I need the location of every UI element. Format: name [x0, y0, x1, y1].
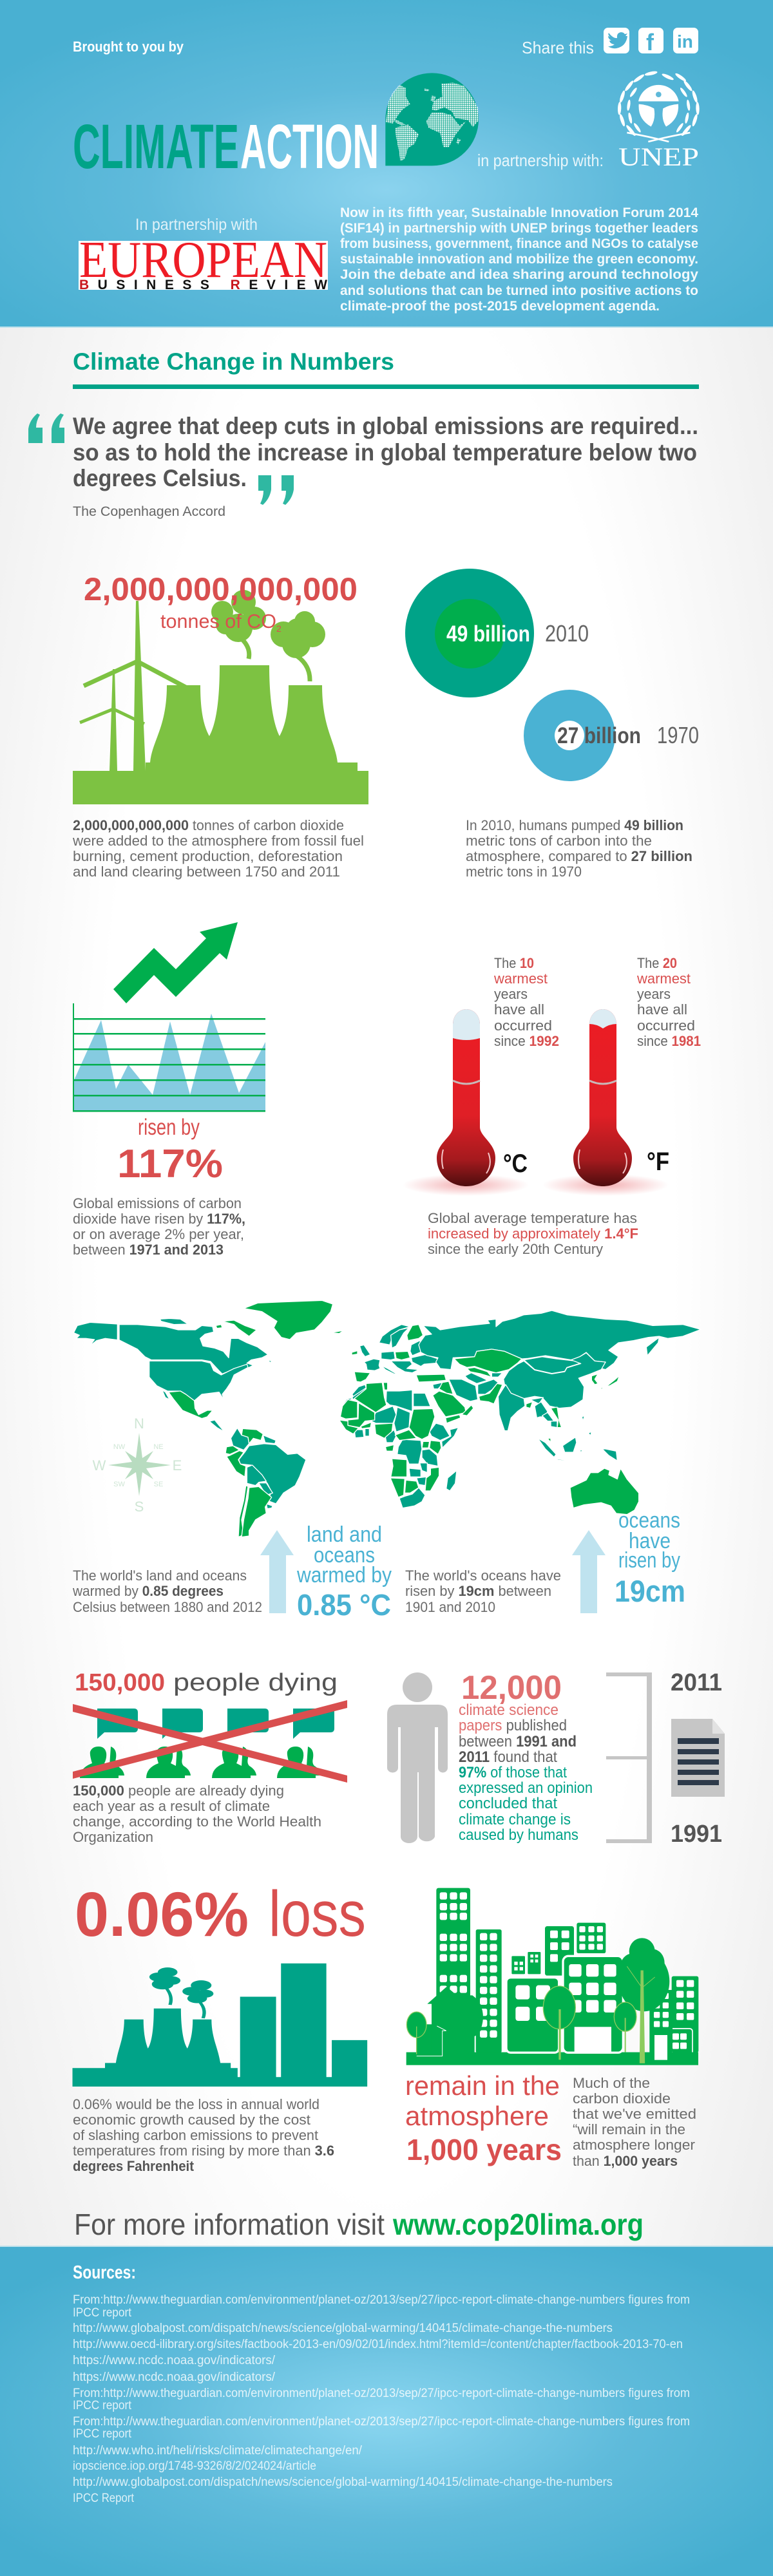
description: papers published	[459, 1717, 567, 1734]
text: 20 warmest: The 20	[637, 955, 677, 971]
sources list: iopscience.iop.org/1748-9326/8/2/024024/article	[73, 2459, 316, 2473]
description: than 1,000 years	[573, 2153, 678, 2169]
icon: twitter	[604, 28, 629, 53]
sources list: From:http://www.theguardian.com/environment/planet-oz/2013/sep/27/ipcc-report-climate-change-numbers figures from	[73, 2387, 690, 2400]
text: 10 warmest: occurred	[494, 1018, 552, 1034]
panel: remain in atmosphere	[405, 1888, 698, 2169]
quote text: so as to hold the increase in global temperature below two	[73, 439, 697, 466]
circle: 1970: 1970	[657, 722, 699, 748]
circle: 1970	[524, 690, 699, 781]
description: climate change is	[459, 1811, 571, 1828]
text: 10 warmest: warmest	[493, 971, 548, 987]
sources list: IPCC report	[73, 2399, 132, 2412]
stat: 19cm: risen by	[618, 1548, 680, 1573]
panel: world map	[72, 1300, 701, 1622]
panel: people dying	[73, 1669, 347, 1845]
description: 150,000 people are already dying	[73, 1783, 284, 1799]
thermometer: fahrenheit	[542, 1009, 669, 1196]
stat: 117%: 117%	[117, 1142, 223, 1186]
icon: person	[387, 1672, 448, 1843]
sources list: http://www.oecd-ilibrary.org/sites/factbook-2013-en/09/02/01/index.html?itemId=/content/chapter/factbook-2013-70-en	[73, 2338, 683, 2351]
quote text	[73, 413, 698, 491]
description	[428, 1210, 638, 1257]
text: 20 warmest: since 1981	[637, 1033, 701, 1049]
text: ocean rise: The world's oceans have	[405, 1567, 561, 1584]
call to action: For more information visit	[74, 2208, 385, 2241]
illustration: wind turbines and cooling towers	[73, 590, 368, 804]
panel: co2 factory	[72, 571, 368, 880]
circle: 1970: 27 billion	[557, 723, 641, 748]
sources list: IPCC report	[73, 2306, 132, 2320]
description: temperatures from rising by more than 3.6	[73, 2143, 334, 2159]
quote text: We agree that deep cuts in global emissions are required...	[73, 413, 698, 439]
stat label: tonnes of CO	[160, 610, 276, 632]
timeline bracket	[606, 1672, 652, 1843]
description	[73, 2096, 334, 2174]
stat: 19cm	[615, 1508, 685, 1608]
illustration: green city	[406, 1888, 698, 2065]
icon: closing quote	[258, 475, 294, 505]
stat: 2 trillion: 2,000,000,000,000	[84, 571, 358, 607]
description: metric tons in 1970	[466, 864, 582, 880]
icon: compass: E	[173, 1457, 182, 1473]
logo: climate action	[73, 73, 479, 182]
text: 10 warmest: The 10	[494, 955, 534, 971]
icon: people	[80, 1747, 321, 1778]
logo: climate action: CLIMATE	[73, 111, 239, 182]
icon: globe	[385, 73, 479, 166]
stat: 0.85 C: 0.85 °C	[297, 1588, 391, 1622]
icon: compass: N	[134, 1416, 144, 1432]
intro paragraph: and solutions that can be turned into positive actions to	[340, 283, 698, 298]
description: 2011 found that	[459, 1748, 557, 1766]
stat: 0.06% loss: loss	[269, 1878, 366, 1950]
sources list: From:http://www.theguardian.com/environment/planet-oz/2013/sep/27/ipcc-report-climate-change-numbers figures from	[73, 2415, 690, 2429]
stat label: 2	[276, 623, 282, 634]
sources list: https://www.ncdc.noaa.gov/indicators/	[73, 2354, 276, 2367]
text: ocean rise: risen by 19cm between	[405, 1583, 551, 1599]
arrow: ocean rise	[572, 1530, 606, 1613]
in partnership with unep: in partnership with:	[477, 151, 604, 170]
thermometer: fahrenheit: °F	[647, 1148, 669, 1176]
description: Global emissions of carbon	[73, 1195, 242, 1211]
panel: temperature	[403, 955, 701, 1257]
in partnership label: In partnership with	[135, 216, 258, 234]
stat: 19cm: oceans	[618, 1508, 680, 1533]
icon: compass	[93, 1416, 182, 1515]
heading: climate change in numbers	[73, 348, 699, 389]
intro paragraph: from business, government, finance and NGOs to catalyse	[340, 236, 698, 251]
description: “will remain in the	[573, 2121, 685, 2137]
sources list: IPCC Report	[73, 2492, 135, 2505]
description: caused by humans	[459, 1826, 578, 1844]
arrow: land warming	[260, 1530, 294, 1613]
description: metric tons of carbon into the	[466, 833, 652, 849]
logo: unep emblem: UNEP	[618, 142, 699, 171]
text: 10 warmest: years	[494, 986, 528, 1002]
description: burning, cement production, deforestation	[73, 848, 343, 864]
text: ocean rise	[405, 1567, 561, 1615]
text: ocean rise: 1901 and 2010	[405, 1599, 495, 1615]
icon: compass: S	[135, 1499, 144, 1515]
quote source: The Copenhagen Accord	[73, 504, 225, 519]
stat: remain 1000 years: atmosphere	[405, 2101, 549, 2131]
panel: science papers	[387, 1669, 725, 1848]
stat: 0.85 C: oceans	[314, 1543, 375, 1567]
quote text: degrees Celsius.	[73, 465, 247, 491]
description: between 1991 and	[459, 1733, 577, 1750]
icon: document	[671, 1719, 725, 1797]
panel: economic loss	[72, 1878, 367, 2174]
description: of slashing carbon emissions to prevent	[73, 2127, 318, 2143]
stat: remain 1000 years: 1,000 years	[406, 2133, 562, 2166]
text: 10 warmest	[493, 955, 559, 1049]
description: between 1971 and 2013	[73, 1242, 224, 1258]
description: increased by approximately 1.4°F	[428, 1226, 638, 1242]
share this: Share this	[522, 38, 594, 57]
description: 97% of those that	[459, 1764, 567, 1781]
description: 2,000,000,000,000 tonnes of carbon dioxide	[73, 817, 344, 833]
panel: emissions rise	[73, 922, 265, 1258]
intro paragraph	[340, 205, 698, 314]
call to action	[74, 2208, 644, 2241]
panel: quote	[28, 413, 698, 519]
sources list	[73, 2293, 690, 2505]
stat: 0.06% loss: 0.06%	[75, 1879, 249, 1949]
stat: remain 1000 years: remain in the	[405, 2070, 560, 2101]
circle: 2010: 49 billion	[446, 621, 530, 647]
intro paragraph: sustainable innovation and mobilize the green economy.	[340, 252, 698, 267]
icon: compass: NE	[153, 1443, 164, 1451]
description	[459, 1701, 593, 1844]
description	[573, 2075, 696, 2169]
description: In 2010, humans pumped 49 billion	[466, 817, 683, 833]
intro paragraph: (SIF14) in partnership with UNEP brings together leaders	[340, 221, 698, 236]
icon: rising arrow	[113, 922, 238, 1003]
panel: emissions circles	[405, 569, 699, 880]
text: 20 warmest: occurred	[637, 1018, 695, 1034]
text: land warming: The world's land and oceans	[73, 1567, 247, 1584]
area chart	[73, 1003, 265, 1112]
panel: header	[0, 0, 773, 328]
intro paragraph: Join the debate and idea sharing around technology	[340, 267, 698, 282]
description: atmosphere longer	[573, 2137, 695, 2153]
stat: 0.85 C: warmed by	[296, 1563, 392, 1587]
logo: unep emblem	[618, 70, 700, 171]
brought to you by: Brought to you by	[73, 39, 184, 55]
year: 2011: 2011	[671, 1669, 722, 1696]
call to action: www.cop20lima.org	[392, 2208, 644, 2241]
text: land warming	[72, 1567, 262, 1615]
icon: compass: NW	[113, 1443, 126, 1451]
description: each year as a result of climate	[73, 1798, 270, 1814]
heading	[75, 1669, 338, 1696]
description: 0.06% would be the loss in annual world	[73, 2096, 320, 2112]
icon: red cross	[73, 1700, 347, 1783]
icon: speech bubbles	[97, 1709, 334, 1739]
stat: 0.06% loss	[75, 1878, 366, 1950]
text: 20 warmest: years	[637, 986, 671, 1002]
illustration: factory and bars	[72, 1964, 367, 2087]
description	[72, 817, 364, 880]
icon: compass: W	[93, 1457, 106, 1473]
description	[73, 1195, 245, 1258]
intro paragraph: Now in its fifth year, Sustainable Innovation Forum 2014	[340, 205, 698, 220]
sources list: http://www.who.int/heli/risks/climate/climatechange/en/	[73, 2444, 363, 2458]
stat: 0.85 C	[296, 1522, 392, 1622]
description	[73, 1783, 321, 1845]
text: 20 warmest	[636, 955, 701, 1049]
description: atmosphere, compared to 27 billion	[466, 848, 692, 864]
description: Organization	[73, 1829, 153, 1845]
description	[466, 817, 692, 880]
sources list: http://www.globalpost.com/dispatch/news/science/global-warming/140415/climate-change-the-numbers	[73, 2476, 613, 2489]
description: carbon dioxide	[573, 2090, 671, 2107]
thermometer: celsius: °C	[503, 1150, 528, 1178]
description: or on average 2% per year,	[73, 1226, 244, 1242]
description: dioxide have risen by 117%,	[73, 1211, 245, 1227]
icon: linkedin: in	[677, 32, 693, 52]
icon: compass: SW	[113, 1481, 125, 1488]
description: expressed an opinion	[459, 1779, 593, 1797]
sources list: IPCC report	[73, 2427, 132, 2441]
logo: european business review: EUROPEAN	[79, 232, 327, 289]
panel: sources	[0, 2246, 773, 2576]
description: since the early 20th Century	[428, 1241, 603, 1257]
heading: climate change in numbers: Climate Change in Numbers	[73, 348, 394, 375]
circle: 2010	[405, 569, 589, 697]
thermometer: celsius	[403, 1009, 529, 1196]
logo: european business review: B USINESS R EVIEW	[79, 278, 327, 292]
icon: compass: SE	[154, 1481, 163, 1488]
description: and land clearing between 1750 and 2011	[73, 864, 340, 880]
sources heading: Sources:	[73, 2262, 136, 2283]
icon: linkedin	[673, 28, 698, 53]
year: 1991: 1991	[671, 1821, 722, 1848]
icon: facebook	[638, 28, 663, 55]
stat: 12,000: 12,000	[461, 1669, 562, 1707]
sources list: http://www.globalpost.com/dispatch/news/science/global-warming/140415/climate-change-the-numbers	[73, 2322, 613, 2335]
description: climate science	[459, 1701, 558, 1719]
heading: people dying	[173, 1669, 338, 1696]
circle: 2010: 2010	[545, 620, 589, 647]
text: land warming: Celsius between 1880 and 2012	[73, 1599, 262, 1615]
logo: climate action: ACTION	[240, 111, 379, 182]
description: were added to the atmosphere from fossil fuel	[72, 833, 364, 849]
intro paragraph: climate-proof the post-2015 development agenda.	[340, 299, 660, 314]
description: that we've emitted	[573, 2106, 696, 2122]
description: economic growth caused by the cost	[73, 2112, 310, 2128]
description: degrees Fahrenheit	[73, 2158, 195, 2174]
icon: opening quote	[28, 413, 64, 443]
text: 20 warmest: have all	[637, 1001, 687, 1018]
text: 10 warmest: have all	[494, 1001, 544, 1018]
stat: risen by: risen by	[138, 1115, 200, 1140]
sources list: From:http://www.theguardian.com/environment/planet-oz/2013/sep/27/ipcc-report-climate-change-numbers figures from	[73, 2293, 690, 2307]
stat: 19cm: 19cm	[615, 1574, 685, 1608]
heading: 150,000	[75, 1669, 165, 1696]
description: change, according to the World Health	[73, 1814, 321, 1830]
description: Global average temperature has	[428, 1210, 637, 1226]
map: world	[73, 1300, 701, 1537]
icon: facebook: f	[646, 29, 654, 55]
text: 10 warmest: since 1992	[494, 1033, 559, 1049]
text: 20 warmest: warmest	[636, 971, 691, 987]
stat: remain 1000 years	[405, 2070, 562, 2166]
text: land warming: warmed by 0.85 degrees	[72, 1583, 224, 1599]
sources list: https://www.ncdc.noaa.gov/indicators/	[73, 2371, 276, 2384]
stat: 19cm: have	[629, 1529, 671, 1553]
stat: 0.85 C: land and	[307, 1522, 382, 1547]
description: Much of the	[573, 2075, 650, 2091]
description: concluded that	[459, 1795, 557, 1812]
